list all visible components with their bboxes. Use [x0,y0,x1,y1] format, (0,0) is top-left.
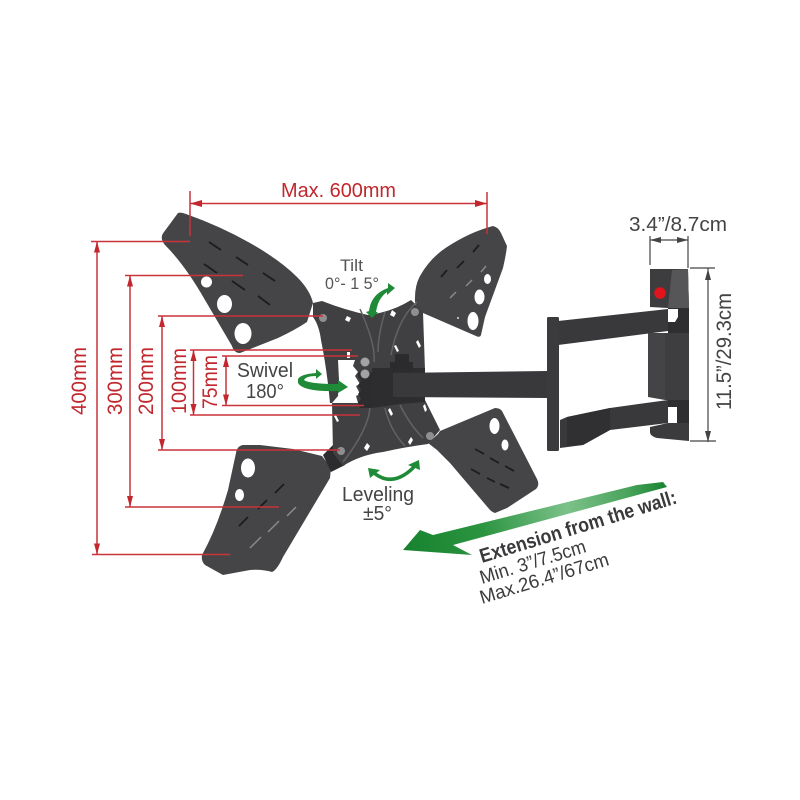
label: tilt: 0°- 1 5° [325,274,379,293]
icon: swivel arrow [298,369,348,393]
label: leveling: Leveling [342,484,414,506]
icon: leveling arrow [368,460,420,479]
wall plate height dimension: 11.5”/29.3cm [713,293,736,410]
wall plate width dimension [629,214,727,268]
wall plate [648,269,689,441]
label: max width: Max. 600mm [281,180,396,202]
label: swivel [237,360,293,403]
mounting plate: top left [162,213,313,353]
label: 300mm: 300mm [104,347,127,415]
dimension arrowheads: red [94,200,487,554]
label: leveling: ±5° [363,503,392,525]
extension arrow [403,482,667,555]
extension arm [393,309,668,451]
label: leveling [342,484,414,525]
wall plate width dimension: 3.4”/8.7cm [629,214,727,236]
label: extension from the wall: Extension from the wall: [477,487,680,568]
label: swivel: 180° [246,381,284,403]
label: swivel: Swivel [237,360,293,382]
dimension lines: red [91,191,487,554]
label: extension from the wall: Min. 3”/7.5cm [477,537,589,589]
label: 100mm: 100mm [168,348,191,414]
center bracket with VESA holes [313,300,440,466]
mounting plate: bottom right [428,408,538,513]
label: 75mm: 75mm [199,355,222,409]
label: extension from the wall [477,487,680,609]
mounting plate: bottom left [202,445,345,575]
wall plate height dimension [690,268,736,442]
label: tilt [325,256,379,293]
label: 200mm: 200mm [135,347,158,415]
label: extension from the wall: Max.26.4”/67cm [477,550,612,609]
label: tilt: Tilt [340,256,363,275]
icon: red mounting dot [654,287,666,299]
icon: tilt arrow [366,283,395,318]
label: 400mm: 400mm [68,347,91,415]
mounting plate: top right [415,226,507,337]
